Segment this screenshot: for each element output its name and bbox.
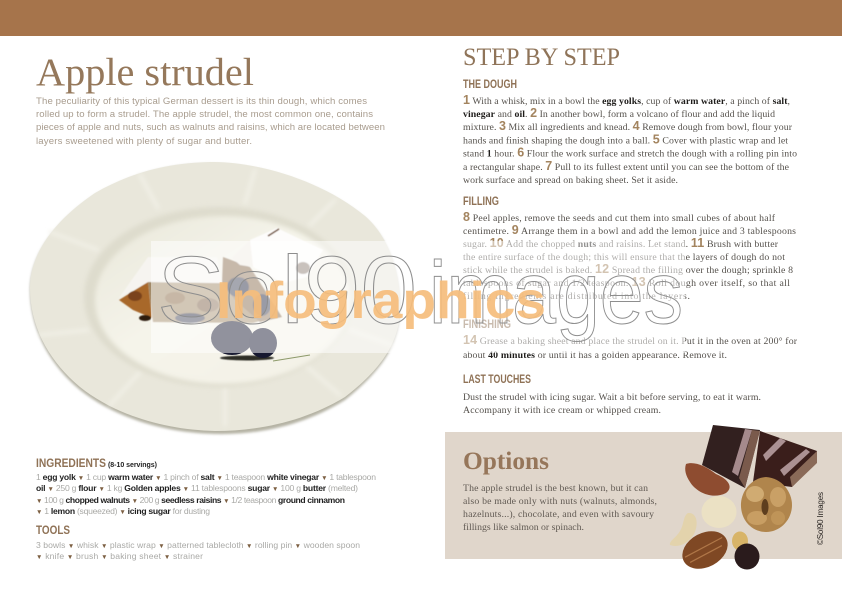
strudel slice <box>119 228 323 323</box>
watermark <box>151 237 685 353</box>
steps: filling: filling ingredients are distributed into the layers. <box>463 291 690 302</box>
chocolate pieces <box>702 425 817 488</box>
heading: ingredients: INGREDIENTS <box>36 456 106 470</box>
credit: ©Sol90 Images <box>816 492 825 545</box>
steps: the dough <box>463 93 797 186</box>
watermark orange text: Infographics <box>216 272 546 330</box>
steps: filling: sugar. 10 Add the chopped nuts and raisins. Let stand. 11 Brush with butter <box>463 236 779 250</box>
heading: tools: TOOLS <box>36 523 70 537</box>
plate rim facets <box>40 170 392 425</box>
heading: step by step: STEP BY STEP <box>463 42 620 71</box>
raisin <box>734 544 760 570</box>
last touches text <box>463 392 761 416</box>
title: Apple strudel <box>36 51 254 94</box>
intro text: pieces of apple and nuts, such as walnuts and raisins, which are located between <box>36 122 385 133</box>
steps: the dough: vinegar and oil. 2 In another bowl, form a volcano of flour and add the liquid <box>463 106 775 120</box>
ingredients list: ▼ 100 g chopped walnuts ▼ 200 g seedless raisins ▼ 1/2 teaspoon ground cinnamon <box>36 495 345 505</box>
options text: also be made only with nuts (walnuts, almonds, <box>463 496 657 507</box>
steps: filling <box>463 210 796 302</box>
options text: The apple strudel is the best known, but it can <box>463 483 648 494</box>
macadamia nut <box>702 496 736 528</box>
steps: filling: stick while the strudel is baked. 12 Spread the filling over the dough; sprinkle 8 <box>463 262 793 276</box>
steps: the dough: mixture. 3 Mix all ingredients and knead. 4 Remove dough from bowl, flour your <box>463 119 793 133</box>
servings note: (8-10 servings) <box>108 462 157 469</box>
steps: the dough: hands and finish shaping the dough into a ball. 5 Cover with plastic wrap and let <box>463 132 788 146</box>
steps: finishing <box>463 333 798 361</box>
options text: hazelnuts...), chocolate, and even with savoury <box>463 509 654 520</box>
ingredients list: ▼ 1 lemon (squeezed) ▼ icing sugar for dusting <box>36 506 210 516</box>
options heading: Options <box>463 448 549 475</box>
section heading: last touches: LAST TOUCHES <box>463 374 531 386</box>
last touches text: Accompany it with ice cream or whipped cream. <box>463 405 661 416</box>
options text: fillings like salmon or spinach. <box>463 522 584 533</box>
section heading: finishing: FINISHING <box>463 319 511 331</box>
watermark outline text <box>157 237 683 344</box>
tools list: 3 bowls ▼ whisk ▼ plastic wrap ▼ patterned tablecloth ▼ rolling pin ▼ wooden spoon <box>36 540 360 550</box>
hazelnut <box>732 532 748 550</box>
header band <box>0 0 842 36</box>
steps: finishing: 14 Grease a baking sheet and place the strudel on it. Put it in the oven at 200° for <box>463 333 798 347</box>
steps: filling: the entire surface of the dough; this will ensure that the layers of dough do not <box>463 252 785 263</box>
intro text: The peculiarity of this typical German dessert is its thin dough, which comes <box>36 96 367 107</box>
options text <box>463 483 657 533</box>
cashew <box>670 513 697 546</box>
section heading: filling: FILLING <box>463 196 499 208</box>
intro text <box>36 96 385 147</box>
watermark outline text: images <box>429 243 683 342</box>
ingredients list: 1 egg yolk ▼ 1 cup warm water ▼ 1 pinch of salt ▼ 1 teaspoon white vinegar ▼ 1 tablespoon <box>36 472 376 482</box>
panel: options <box>445 425 842 576</box>
last touches text: Dust the strudel with icing sugar. Wait a bit before serving, to eat it warm. <box>463 392 761 403</box>
plate photo <box>30 162 400 434</box>
steps: the dough: 1 With a whisk, mix in a bowl the egg yolks, cup of warm water, a pinch of salt, <box>463 93 790 107</box>
dried strawberry <box>685 463 730 496</box>
intro text: rolled up to form a strudel. The apple strudel, the most common one, contains <box>36 109 373 120</box>
ingredients list <box>36 472 376 516</box>
steps: filling: tablespoons of sugar and 1/2 teaspoon. 13 Roll dough over itself, so that all <box>463 275 790 289</box>
dark grapes <box>211 321 310 361</box>
ingredients list: oil ▼ 250 g flour ▼ 1 kg Golden apples ▼ 11 tablespoons sugar ▼ 100 g butter (melted) <box>36 483 358 493</box>
tools list: ▼ knife ▼ brush ▼ baking sheet ▼ strainer <box>36 551 203 561</box>
steps: the dough: work surface and spread on baking sheet. Set it aside. <box>463 175 678 186</box>
pecan <box>676 524 734 576</box>
tools list <box>36 540 360 561</box>
steps: filling: centimetre. 9 Arrange them in a bowl and add the lemon juice and 3 tablespoons <box>463 223 796 237</box>
walnut <box>741 477 792 532</box>
steps: the dough: a rectangular shape. 7 Pull to its fullest extent until you can see the bottom of the <box>463 159 790 173</box>
steps: filling: 8 Peel apples, remove the seeds and cut them into small cubes of about half <box>463 210 776 224</box>
steps: the dough: stand 1 hour. 6 Flour the work surface and stretch the dough with a rolling pin into <box>463 146 797 160</box>
steps: finishing: about 40 minutes or until it has a golden appearance. Remove it. <box>463 350 727 361</box>
section heading: the dough: THE DOUGH <box>463 79 517 91</box>
watermark outline text: Sol90 <box>157 237 417 344</box>
intro text: layers sweetened with plenty of sugar and butter. <box>36 136 252 147</box>
